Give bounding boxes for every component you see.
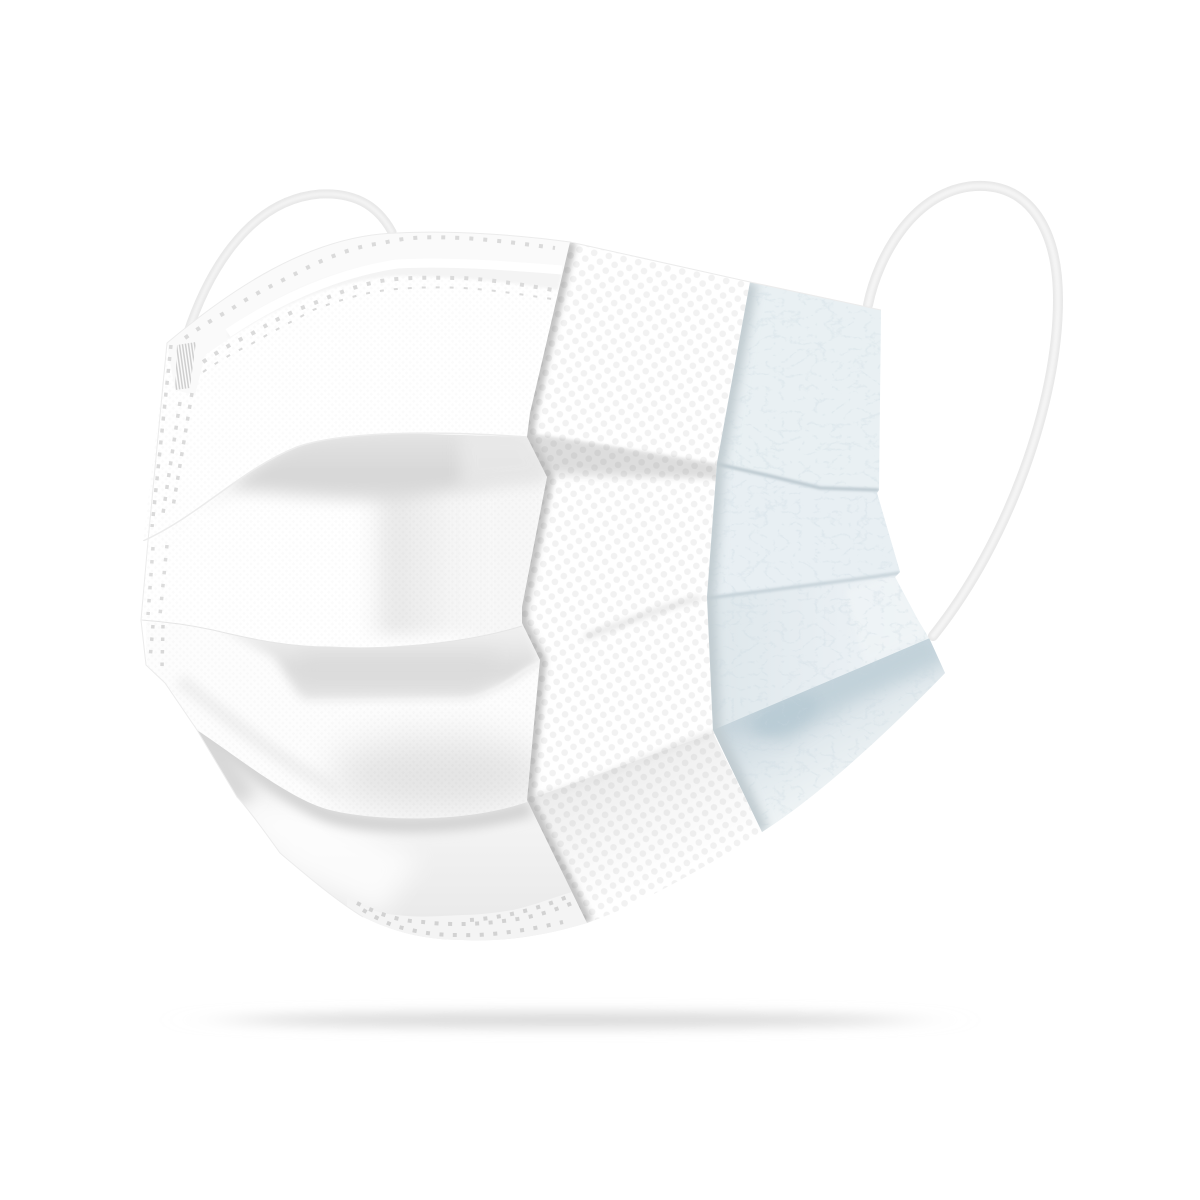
left perforation, second pleat [148,545,167,615]
left edge shadow of middle layer [522,242,587,923]
perforation rows [185,237,555,372]
fold shadow one [227,434,544,505]
third pleat [163,625,540,818]
blue panel three [718,597,746,724]
blue panel two [708,470,900,600]
blue inner layer [707,282,945,832]
second pleat edge line [141,620,522,648]
upper seal strip [167,232,570,395]
left perforation, third pleat [150,625,163,668]
hatched weld patch [175,342,196,390]
lower pleat [198,730,572,938]
nose wire band [286,270,558,306]
blue fold lines [717,464,879,490]
middle layer fold three [527,733,713,800]
top pleat with nose band [143,232,570,541]
middle layer panel four [536,733,734,854]
left perforation columns [152,345,192,527]
middle layer fold one [527,432,722,480]
dotted middle layer [522,242,758,923]
blue vein texture [724,286,926,818]
mask outline [141,232,881,917]
left ear loop [187,194,392,335]
fold shadow two [238,625,540,700]
left edge shadow of blue layer [707,282,762,832]
right ear loop [868,186,1058,636]
second pleat [146,434,547,648]
white outer layer [130,232,600,950]
mask [130,230,960,950]
ground shadow [230,1012,910,1028]
bottom perforated band [356,896,586,940]
middle layer dot texture [522,243,758,920]
middle layer fold two [585,598,700,637]
blue panel four [716,638,945,778]
